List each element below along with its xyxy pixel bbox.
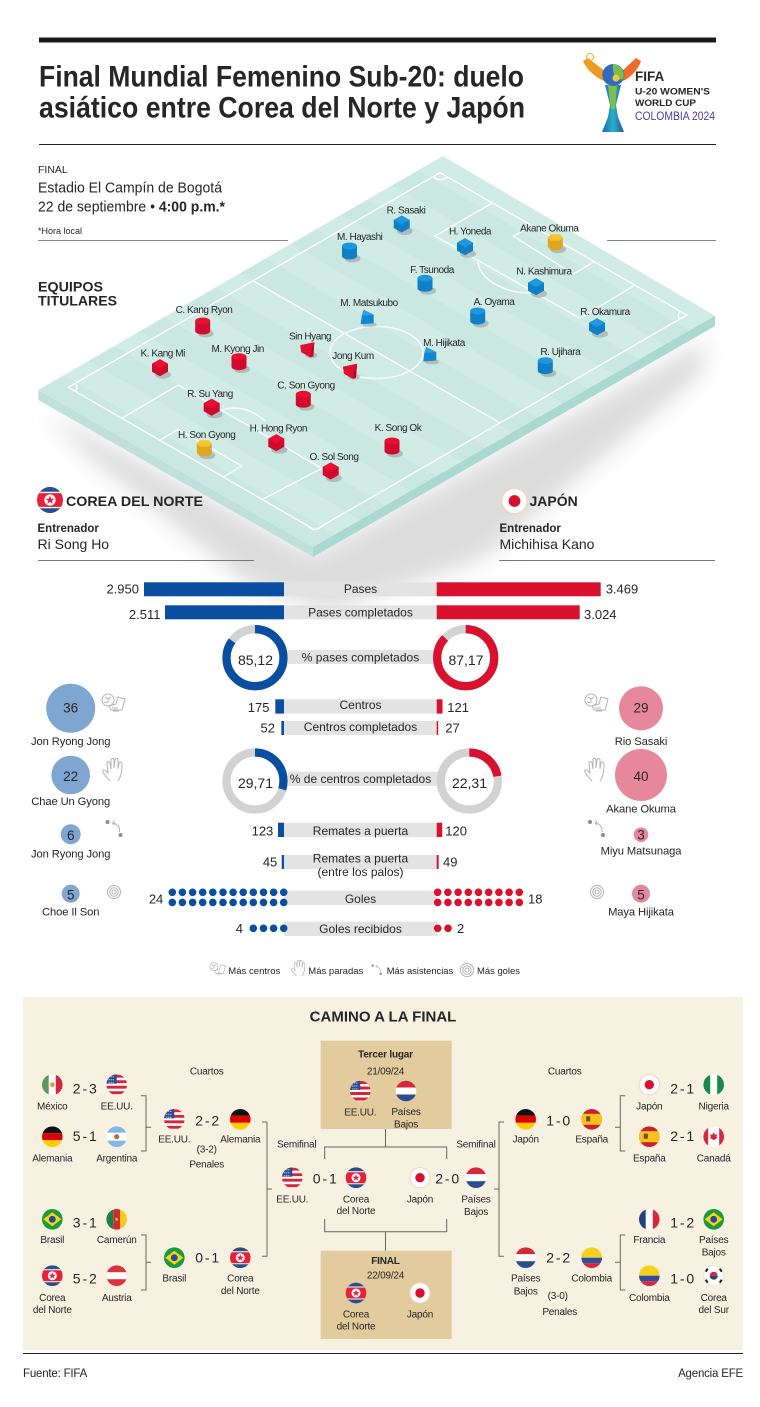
top players: Japón xyxy=(585,686,682,919)
legend: Más paradas xyxy=(308,966,364,977)
players: Japan xyxy=(337,206,631,377)
semifinal: Japón vs Países Bajos: Bajos xyxy=(464,1207,488,1218)
footer rule xyxy=(23,1353,743,1354)
donut: Japón 87,17 xyxy=(437,629,494,686)
shadow of pitch xyxy=(48,340,708,610)
stat: centros completados: 52 xyxy=(261,721,275,736)
team: Corea del Norte: COREA DEL NORTE xyxy=(66,493,203,509)
player: H. Yoneda xyxy=(449,226,492,258)
most goals: 5 xyxy=(637,887,645,902)
box: tercer lugar: Bajos xyxy=(394,1119,418,1130)
stat: centros: 121 xyxy=(447,700,469,715)
match: EE.UU. vs Alemania: Alemania xyxy=(220,1134,261,1145)
box: final xyxy=(321,1251,452,1339)
round labels: Cuartos xyxy=(548,1066,582,1077)
logo: FIFA U-20 Women's World Cup Colombia 2024 xyxy=(583,54,715,132)
match: EE.UU. vs Alemania: Penales xyxy=(189,1160,224,1171)
most crosses: 36 xyxy=(63,700,78,716)
player: C. Son Gyong xyxy=(277,380,335,411)
player: R. Su Yang xyxy=(187,389,233,418)
player: M. Hijikata xyxy=(423,338,466,364)
match: EE.UU. vs Alemania: 2 - 2 xyxy=(195,1113,219,1129)
most assists xyxy=(31,820,122,861)
stat: porcentaje pases completados: % pases completados xyxy=(302,651,419,665)
title xyxy=(39,60,525,124)
stat: goles: 18 xyxy=(528,891,542,906)
donut: Japón 87,17: 87,17 xyxy=(448,652,484,668)
match: Francia vs Países Bajos: Francia xyxy=(633,1235,666,1246)
dots: goles Japón xyxy=(434,888,523,906)
match: Brasil vs Camerún: Brasil xyxy=(40,1235,64,1246)
match: Países Bajos vs Colombia: (3-0) xyxy=(548,1291,568,1302)
semifinal: Japón vs Países Bajos: 2 - 0 xyxy=(435,1171,459,1187)
match: Japón vs Nigeria: Japón xyxy=(636,1102,662,1113)
player: C. Son Gyong: C. Son Gyong xyxy=(277,380,335,392)
stat: remates a puerta: 123 xyxy=(252,824,273,839)
most goals: Maya Hijikata xyxy=(608,907,675,919)
team: Japón: Michihisa Kano xyxy=(500,536,595,552)
donut: Corea 29,71: 29,71 xyxy=(238,775,273,791)
donut: Corea 85,12: 85,12 xyxy=(238,652,273,668)
stat: centros: Centros xyxy=(339,698,382,712)
title: Final Mundial Femenino Sub-20: duelo xyxy=(39,60,524,94)
player: A. Oyama xyxy=(470,297,515,328)
match: Brasil vs Camerún: 3 - 1 xyxy=(73,1214,97,1230)
most assists: Jon Ryong Jong xyxy=(31,849,110,861)
match: Brasil vs Camerún: Camerún xyxy=(97,1235,137,1246)
player: R. Ujihara: R. Ujihara xyxy=(540,347,581,358)
most saves: Chae Un Gyong xyxy=(31,796,110,808)
match: Corea del Norte vs Austria: 5 - 2 xyxy=(73,1271,97,1287)
legend xyxy=(210,960,520,977)
stat: porcentaje de centros completados: % de centros completados xyxy=(290,772,431,786)
donut: Corea 29,71 xyxy=(226,752,284,810)
match: Países Bajos vs Colombia: Colombia xyxy=(571,1273,613,1284)
match: Países Bajos vs Colombia: Países xyxy=(511,1273,541,1284)
player: F. Tsunoda: F. Tsunoda xyxy=(410,265,455,276)
match info: *Hora local xyxy=(38,226,82,236)
player: O. Sol Song xyxy=(310,452,358,482)
match: Países Bajos vs Colombia: 2 - 2 xyxy=(546,1250,570,1266)
player: C. Kang Ryon xyxy=(176,305,232,338)
player: M. Hijikata: M. Hijikata xyxy=(423,338,466,349)
semifinal: EE.UU. vs Corea del Norte xyxy=(276,1167,376,1217)
most crosses: Rio Sasaki xyxy=(615,736,667,748)
match: Francia vs Países Bajos: Bajos xyxy=(702,1247,726,1258)
match: Alemania vs Argentina: Alemania xyxy=(32,1154,73,1165)
match: EE.UU. vs Alemania: EE.UU. xyxy=(158,1134,190,1145)
match: España vs Canadá: España xyxy=(633,1154,666,1165)
team: Japón: JAPÓN xyxy=(530,492,578,509)
stat: goles xyxy=(149,888,542,906)
semifinal: Japón vs Países Bajos xyxy=(407,1167,491,1218)
match: México vs EE.UU.: EE.UU. xyxy=(101,1102,133,1113)
match info: 22 de septiembre • 4:00 p.m.* xyxy=(38,200,225,216)
most crosses: 29 xyxy=(633,700,649,716)
match: Colombia vs Corea del Sur: Corea xyxy=(701,1293,727,1304)
round labels: Cuartos xyxy=(190,1066,224,1077)
match: Países Bajos vs Colombia: Bajos xyxy=(514,1286,538,1298)
match info: FINAL xyxy=(38,164,68,176)
stat: goles recibidos: 4 xyxy=(236,921,243,936)
match: Japón vs España xyxy=(513,1108,609,1145)
donut: Corea 85,12 xyxy=(226,629,284,686)
most goals: 5 xyxy=(67,887,74,902)
stat: pases: 2.950 xyxy=(106,581,139,596)
box: final: Corea xyxy=(343,1310,370,1321)
most assists xyxy=(588,820,682,858)
most assists: 3 xyxy=(637,828,645,842)
stat: remates a puerta: 120 xyxy=(445,824,467,839)
logo: FIFA U-20 Women's World Cup Colombia 2024: COLOMBIA 2024 xyxy=(635,109,715,123)
match: Japón vs Nigeria: 2 - 1 xyxy=(670,1080,694,1096)
match: Brasil vs Corea del Norte xyxy=(162,1247,260,1297)
rule under title xyxy=(39,144,716,145)
most saves xyxy=(585,749,677,816)
stat: remates a puerta: Remates a puerta xyxy=(313,824,409,838)
player: R. Su Yang: R. Su Yang xyxy=(187,389,233,400)
player: R. Ujihara xyxy=(538,347,581,377)
player: N. Kashimura xyxy=(516,266,572,298)
match: Alemania vs Argentina xyxy=(32,1126,138,1165)
player: M. Kyong Jin: M. Kyong Jin xyxy=(211,344,264,355)
box: tercer lugar: Países xyxy=(391,1107,421,1118)
match: Colombia vs Corea del Sur: del Sur xyxy=(699,1305,730,1316)
player: R. Sasaki xyxy=(387,206,426,235)
logo: FIFA U-20 Women's World Cup Colombia 2024: U-20 WOMEN'S xyxy=(635,86,710,97)
legend: Más asistencias xyxy=(387,966,453,977)
match: EE.UU. vs Alemania xyxy=(158,1108,261,1171)
player: R. Sasaki: R. Sasaki xyxy=(387,206,426,216)
match: Brasil vs Corea del Norte: Brasil xyxy=(162,1273,186,1284)
player: K. Song Ok: K. Song Ok xyxy=(375,423,423,434)
most crosses xyxy=(585,686,667,748)
match: Japón vs España: Japón xyxy=(513,1134,539,1145)
match: Colombia vs Corea del Sur: Colombia xyxy=(629,1293,670,1304)
match info: Estadio El Campín de Bogotá xyxy=(38,181,223,197)
match: España vs Canadá: Canadá xyxy=(697,1154,731,1165)
player: K. Kang Mi xyxy=(140,348,185,379)
stat: centros: 175 xyxy=(248,700,270,715)
team: Japón xyxy=(500,488,595,552)
stat: remates entre los palos: (entre los palos) xyxy=(317,865,404,879)
round labels: Semifinal xyxy=(277,1140,316,1151)
stat: centros completados xyxy=(261,720,460,736)
logo: FIFA U-20 Women's World Cup Colombia 2024: FIFA xyxy=(635,69,664,84)
source: Fuente: FIFA xyxy=(23,1368,88,1380)
team: Japón: Entrenador xyxy=(500,523,561,535)
match: Francia vs Países Bajos xyxy=(633,1208,729,1258)
player: Sin Hyang xyxy=(289,332,331,358)
most saves: Akane Okuma xyxy=(606,804,677,816)
match: México vs EE.UU.: 2 - 3 xyxy=(73,1080,97,1096)
stat: pases completados: Pases completados xyxy=(308,606,413,620)
box: tercer lugar: 21/09/24 xyxy=(367,1066,405,1077)
stat: goles recibidos: 2 xyxy=(457,921,464,936)
semifinal: Japón vs Países Bajos: Países xyxy=(461,1194,491,1205)
team: Corea del Norte: Ri Song Ho xyxy=(38,536,109,552)
semifinal: EE.UU. vs Corea del Norte: 0 - 1 xyxy=(313,1171,337,1187)
box: final: Japón xyxy=(407,1310,433,1321)
most goals xyxy=(590,885,675,919)
player: Jong Kum: Jong Kum xyxy=(332,351,374,362)
players: North Korea xyxy=(140,305,423,482)
stats comparison xyxy=(106,581,638,936)
match: EE.UU. vs Alemania: (3-2) xyxy=(197,1144,217,1155)
legend: Más goles xyxy=(477,966,520,977)
match: Brasil vs Corea del Norte: Corea xyxy=(227,1273,254,1284)
match: Alemania vs Argentina: 5 - 1 xyxy=(73,1128,97,1144)
team: Corea del Norte xyxy=(36,486,203,552)
logo: FIFA U-20 Women's World Cup Colombia 2024: WORLD CUP xyxy=(635,98,697,109)
match: Japón vs Nigeria xyxy=(636,1074,729,1113)
player: Jong Kum xyxy=(332,351,374,380)
box: final: 22/09/24 xyxy=(367,1270,405,1281)
player: H. Son Gyong xyxy=(178,430,235,459)
match: Corea del Norte vs Austria: Austria xyxy=(102,1293,132,1304)
semifinal: Japón vs Países Bajos: Japón xyxy=(407,1194,433,1205)
match: Francia vs Países Bajos: 1 - 2 xyxy=(670,1214,694,1230)
semifinal: EE.UU. vs Corea del Norte: Corea xyxy=(343,1194,370,1205)
stat: pases xyxy=(106,581,638,596)
player: A. Oyama: A. Oyama xyxy=(474,297,515,308)
semifinal: EE.UU. vs Corea del Norte: del Norte xyxy=(337,1206,376,1217)
most saves xyxy=(31,756,122,808)
match: Brasil vs Camerún xyxy=(40,1208,137,1246)
box: tercer lugar: Tercer lugar xyxy=(358,1049,413,1060)
match: Brasil vs Corea del Norte: del Norte xyxy=(221,1286,260,1297)
player: Akane Okuma: Akane Okuma xyxy=(520,224,579,234)
player: M. Hayashi xyxy=(337,232,383,262)
most saves: 40 xyxy=(633,769,649,784)
top players: Corea del Norte xyxy=(31,684,125,919)
stat: remates entre los palos: 49 xyxy=(443,855,457,870)
stat: pases completados xyxy=(129,605,617,622)
stat: remates entre los palos xyxy=(263,852,457,879)
donut: Japón 22,31: 22,31 xyxy=(452,775,487,791)
match: España vs Canadá xyxy=(633,1126,731,1165)
round labels: Semifinal xyxy=(456,1140,496,1151)
round labels xyxy=(190,1066,582,1151)
player: K. Kang Mi: K. Kang Mi xyxy=(140,348,185,360)
match: Corea del Norte vs Austria xyxy=(33,1265,132,1316)
player: O. Sol Song: O. Sol Song xyxy=(310,452,358,463)
stat: porcentaje pases completados xyxy=(226,629,494,686)
box: tercer lugar: EE.UU. xyxy=(344,1108,376,1119)
stat: goles: Goles xyxy=(345,892,376,906)
match: Corea del Norte vs Austria: del Norte xyxy=(33,1305,72,1316)
most assists: 6 xyxy=(67,828,74,843)
match: México vs EE.UU. xyxy=(37,1074,133,1113)
stat: centros completados: 27 xyxy=(445,721,460,736)
pitch xyxy=(38,156,717,566)
match: México vs EE.UU.: México xyxy=(37,1102,68,1113)
bracket lines xyxy=(141,1096,625,1290)
match: Alemania vs Argentina: Argentina xyxy=(96,1154,138,1165)
stat: goles recibidos xyxy=(236,921,464,936)
heading: camino a la final: CAMINO A LA FINAL xyxy=(310,1009,456,1026)
legend: Más centros xyxy=(228,966,281,977)
most goals xyxy=(42,885,120,919)
player: Akane Okuma xyxy=(520,224,579,253)
match: Colombia vs Corea del Sur xyxy=(629,1265,730,1316)
stat: centros completados: Centros completados xyxy=(304,720,417,734)
most assists: Miyu Matsunaga xyxy=(601,846,682,858)
player: K. Song Ok xyxy=(375,423,423,458)
match: Japón vs Nigeria: Nigeria xyxy=(699,1102,729,1113)
player: Sin Hyang: Sin Hyang xyxy=(289,332,331,343)
player: M. Matsukubo: M. Matsukubo xyxy=(340,298,399,309)
stat: remates entre los palos: Remates a puerta xyxy=(313,852,409,866)
player: R. Okamura xyxy=(580,307,631,338)
match: Brasil vs Corea del Norte: 0 - 1 xyxy=(195,1250,219,1266)
match: Francia vs Países Bajos: Países xyxy=(699,1235,729,1246)
heading: equipos titulares: TITULARES xyxy=(38,292,117,308)
stat: pases completados: 2.511 xyxy=(129,607,160,622)
player: H. Hong Ryon: H. Hong Ryon xyxy=(250,424,307,434)
stat: remates entre los palos: 45 xyxy=(263,855,277,870)
player: C. Kang Ryon: C. Kang Ryon xyxy=(176,305,232,316)
heading: equipos titulares xyxy=(38,278,117,308)
most goals: Choe Il Son xyxy=(42,907,99,919)
semifinal: EE.UU. vs Corea del Norte: EE.UU. xyxy=(276,1194,308,1205)
player: M. Hayashi: M. Hayashi xyxy=(337,232,383,243)
match: Japón vs España: España xyxy=(575,1134,609,1145)
match: Países Bajos vs Colombia xyxy=(511,1247,613,1318)
player: H. Hong Ryon xyxy=(250,424,307,454)
panel: camino a la final xyxy=(23,997,743,1350)
box: final: FINAL xyxy=(371,1256,400,1267)
stat: porcentaje de centros completados xyxy=(226,752,498,810)
stat: goles recibidos: Goles recibidos xyxy=(319,922,402,936)
match: Japón vs España: 1 - 0 xyxy=(546,1113,570,1129)
most crosses xyxy=(31,684,125,748)
player: F. Tsunoda xyxy=(410,265,455,295)
title: asiático entre Corea del Norte y Japón xyxy=(39,92,525,124)
dots: goles Corea xyxy=(168,888,288,906)
most crosses: Jon Ryong Jong xyxy=(31,736,110,748)
player: R. Okamura: R. Okamura xyxy=(580,307,631,318)
stat: pases: 3.469 xyxy=(606,581,638,596)
most saves: 22 xyxy=(63,769,78,784)
credit: Agencia EFE xyxy=(678,1368,744,1380)
stat: pases: Pases xyxy=(344,582,377,596)
box: final: del Norte xyxy=(337,1322,376,1333)
donut: Japón 22,31 xyxy=(441,752,498,810)
heading: equipos titulares: EQUIPOS xyxy=(38,278,103,294)
stat: centros xyxy=(248,698,469,715)
stat: goles: 24 xyxy=(149,891,163,906)
box: tercer lugar xyxy=(321,1041,452,1130)
match: Corea del Norte vs Austria: Corea xyxy=(39,1293,66,1304)
player: H. Yoneda: H. Yoneda xyxy=(449,226,492,238)
player: N. Kashimura: N. Kashimura xyxy=(516,266,572,278)
top black bar xyxy=(39,38,716,42)
match: Países Bajos vs Colombia: Penales xyxy=(542,1307,577,1318)
match: Colombia vs Corea del Sur: 1 - 0 xyxy=(670,1271,694,1287)
player: M. Kyong Jin xyxy=(211,344,264,373)
match info xyxy=(38,164,225,236)
match: España vs Canadá: 2 - 1 xyxy=(670,1128,694,1144)
stat: pases completados: 3.024 xyxy=(584,607,617,622)
player: M. Matsukubo xyxy=(340,298,399,327)
player: H. Son Gyong: H. Son Gyong xyxy=(178,430,235,441)
team: Corea del Norte: Entrenador xyxy=(38,523,99,535)
stat: remates a puerta xyxy=(252,823,467,839)
